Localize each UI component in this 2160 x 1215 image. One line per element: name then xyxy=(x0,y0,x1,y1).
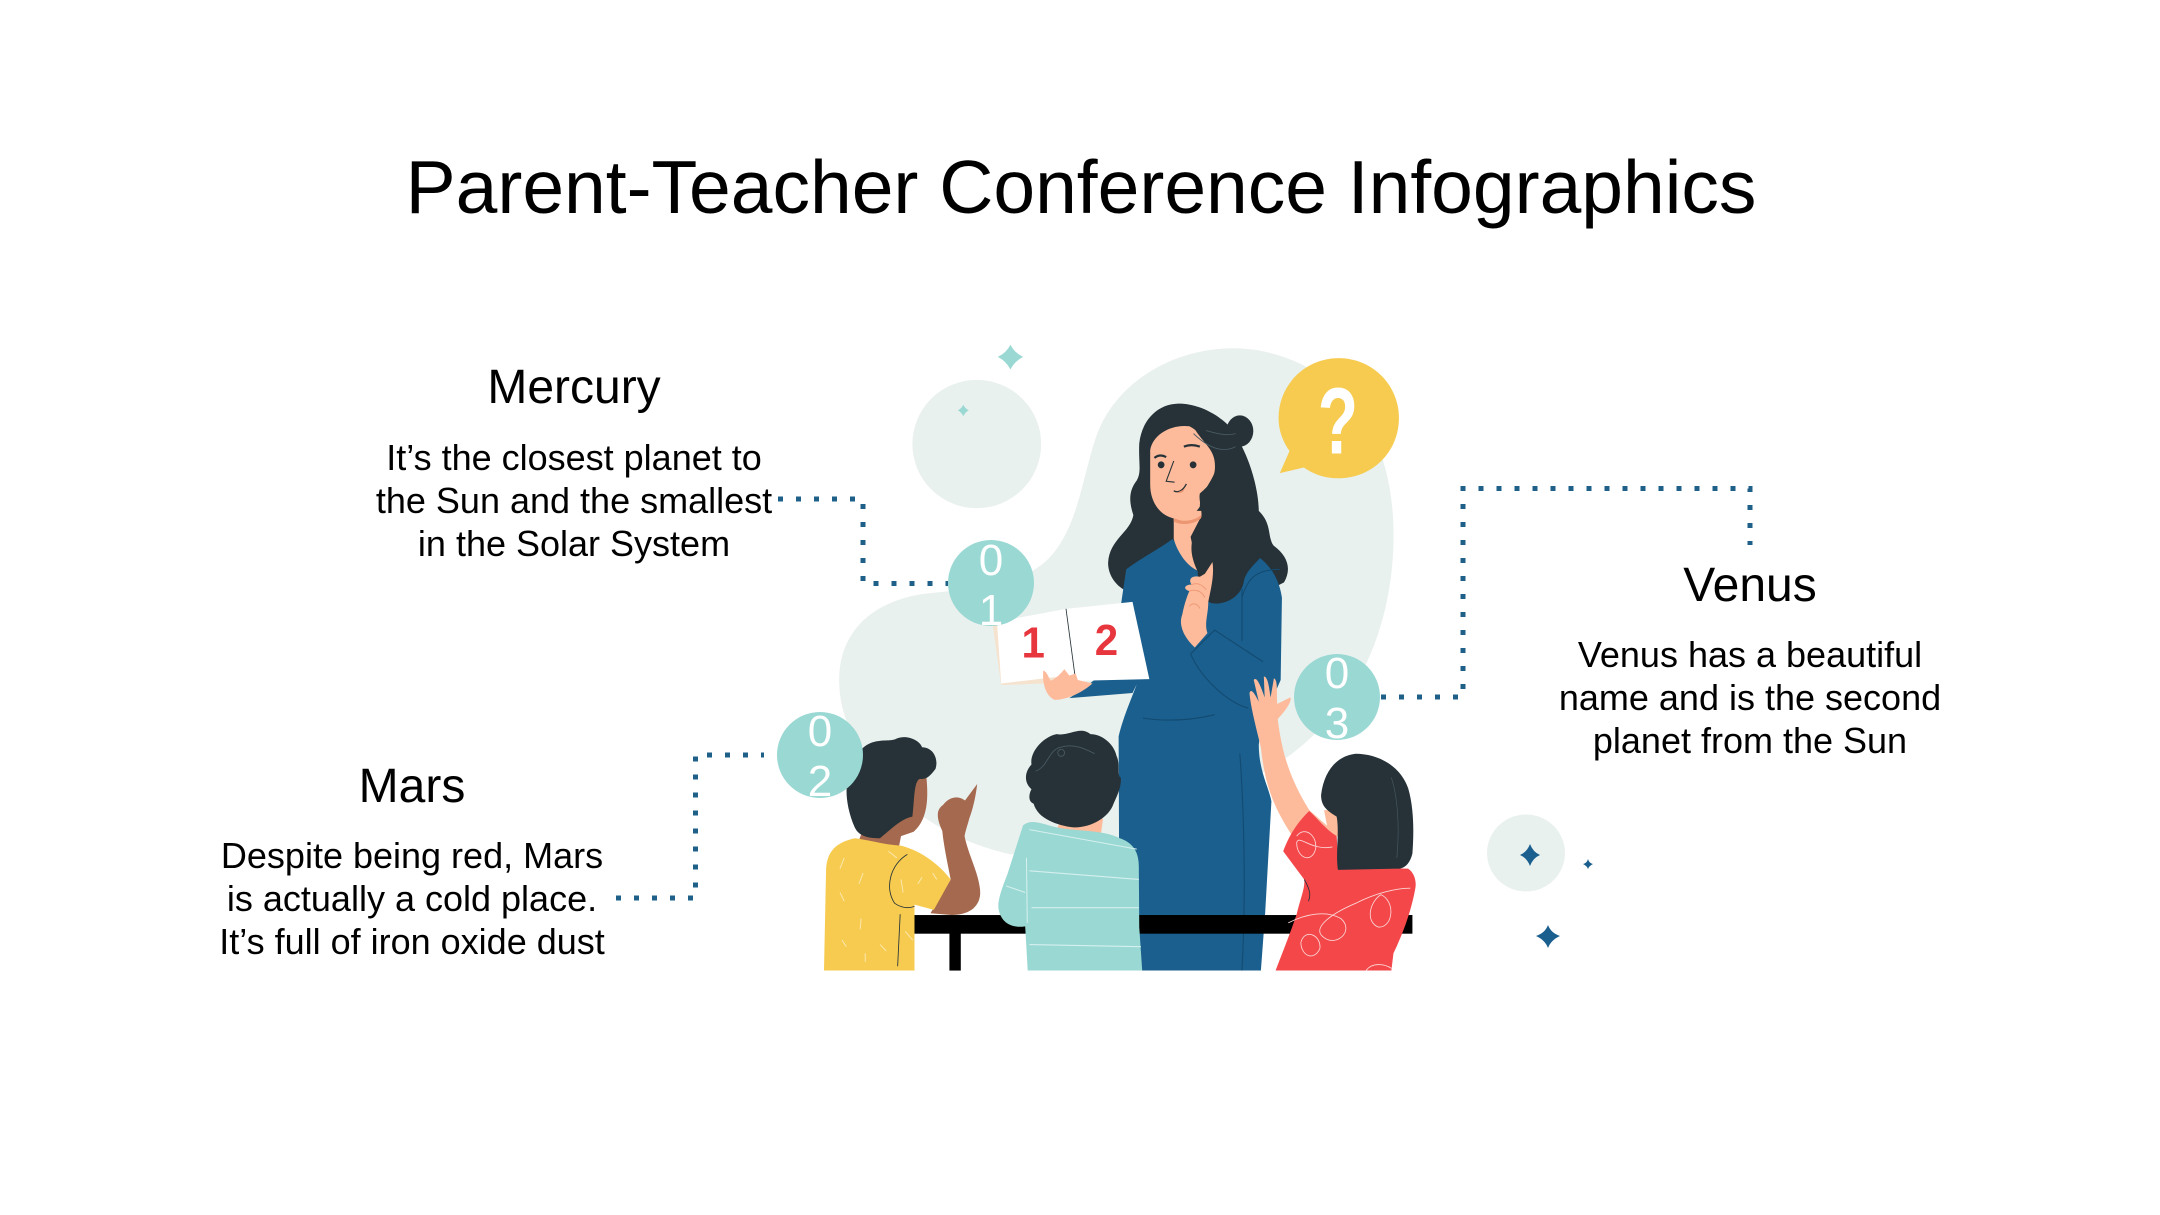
icon: small sparkle xyxy=(1583,859,1593,869)
number card book: 1 xyxy=(1021,619,1045,668)
number badge 03: 3 xyxy=(1325,699,1349,748)
dotted connector: Venus xyxy=(1381,488,1750,697)
hair xyxy=(1321,754,1413,870)
number badge 01: 1 xyxy=(979,586,1003,635)
teacher xyxy=(1069,404,1288,971)
text block: Mercury xyxy=(376,361,772,564)
child 2: teal shirt xyxy=(998,731,1142,971)
description: Mercury: It’s the closest planet to xyxy=(386,437,762,478)
number badge 03 xyxy=(1294,649,1380,748)
curly hair xyxy=(1026,731,1121,827)
curly hair xyxy=(847,737,936,838)
description: Mars: Despite being red, Mars xyxy=(221,835,603,876)
face xyxy=(1150,426,1216,519)
decorative circle xyxy=(912,380,1041,508)
hair front xyxy=(1191,419,1267,604)
description: Venus: name and is the second xyxy=(1559,677,1941,718)
icon: large teal sparkle xyxy=(998,345,1023,369)
number card book: 2 xyxy=(1095,617,1118,665)
neck xyxy=(1324,810,1341,836)
title: Parent-Teacher Conference Infographics xyxy=(406,145,1756,229)
raised arm xyxy=(1250,677,1339,836)
holding hand xyxy=(1043,669,1093,700)
dotted connector: Mars xyxy=(616,755,764,898)
description: Mars: is actually a cold place. xyxy=(227,878,597,919)
description: Mercury: the Sun and the smallest xyxy=(376,480,772,521)
hair strand lines xyxy=(1194,431,1236,450)
text block: Venus xyxy=(1559,559,1941,761)
raised hand xyxy=(1181,562,1213,647)
pointing arm xyxy=(930,784,980,915)
description: Venus: Venus has a beautiful xyxy=(1578,634,1922,675)
dress xyxy=(1069,539,1282,971)
number badge 01 xyxy=(948,536,1034,635)
hair bun xyxy=(1226,415,1253,447)
number badge 01: 0 xyxy=(979,536,1003,585)
neck xyxy=(1057,819,1103,834)
yellow shirt xyxy=(824,838,951,971)
background blob xyxy=(839,348,1394,854)
speech bubble with question mark xyxy=(1279,358,1399,478)
number card book xyxy=(993,602,1149,700)
red shirt xyxy=(1276,811,1416,971)
number badge 02: 2 xyxy=(808,757,832,806)
heading: Mars: Mars xyxy=(359,760,465,813)
neck xyxy=(1174,511,1204,571)
illustration: teacher and children xyxy=(824,345,1416,971)
icon: sparkle in circle xyxy=(1520,844,1540,866)
sleeve and dress folds xyxy=(1143,569,1280,971)
icon: large sparkle xyxy=(1536,925,1560,948)
heading: Mercury: Mercury xyxy=(487,361,661,414)
child 1: yellow shirt xyxy=(824,737,980,971)
number badge 03: 0 xyxy=(1325,649,1349,698)
heading: Venus: Venus xyxy=(1683,559,1817,612)
face and neck xyxy=(859,771,927,847)
text block: Mars xyxy=(219,760,605,962)
description: Mercury: in the Solar System xyxy=(418,523,730,564)
hair back xyxy=(1108,404,1288,602)
facial features xyxy=(1154,445,1200,493)
table xyxy=(914,915,1412,971)
description: Venus: planet from the Sun xyxy=(1593,720,1907,761)
icon: small teal sparkle xyxy=(958,405,969,416)
teal shirt xyxy=(998,822,1142,971)
number badge 02: 0 xyxy=(808,707,832,756)
speech bubble with question mark: ? xyxy=(1318,369,1358,474)
dotted connector: Mercury xyxy=(778,499,948,584)
number badge 02 xyxy=(777,707,863,806)
child 3: red shirt xyxy=(1250,677,1416,971)
description: Mars: It’s full of iron oxide dust xyxy=(219,921,605,962)
decorative circle with sparkles xyxy=(1487,814,1593,948)
